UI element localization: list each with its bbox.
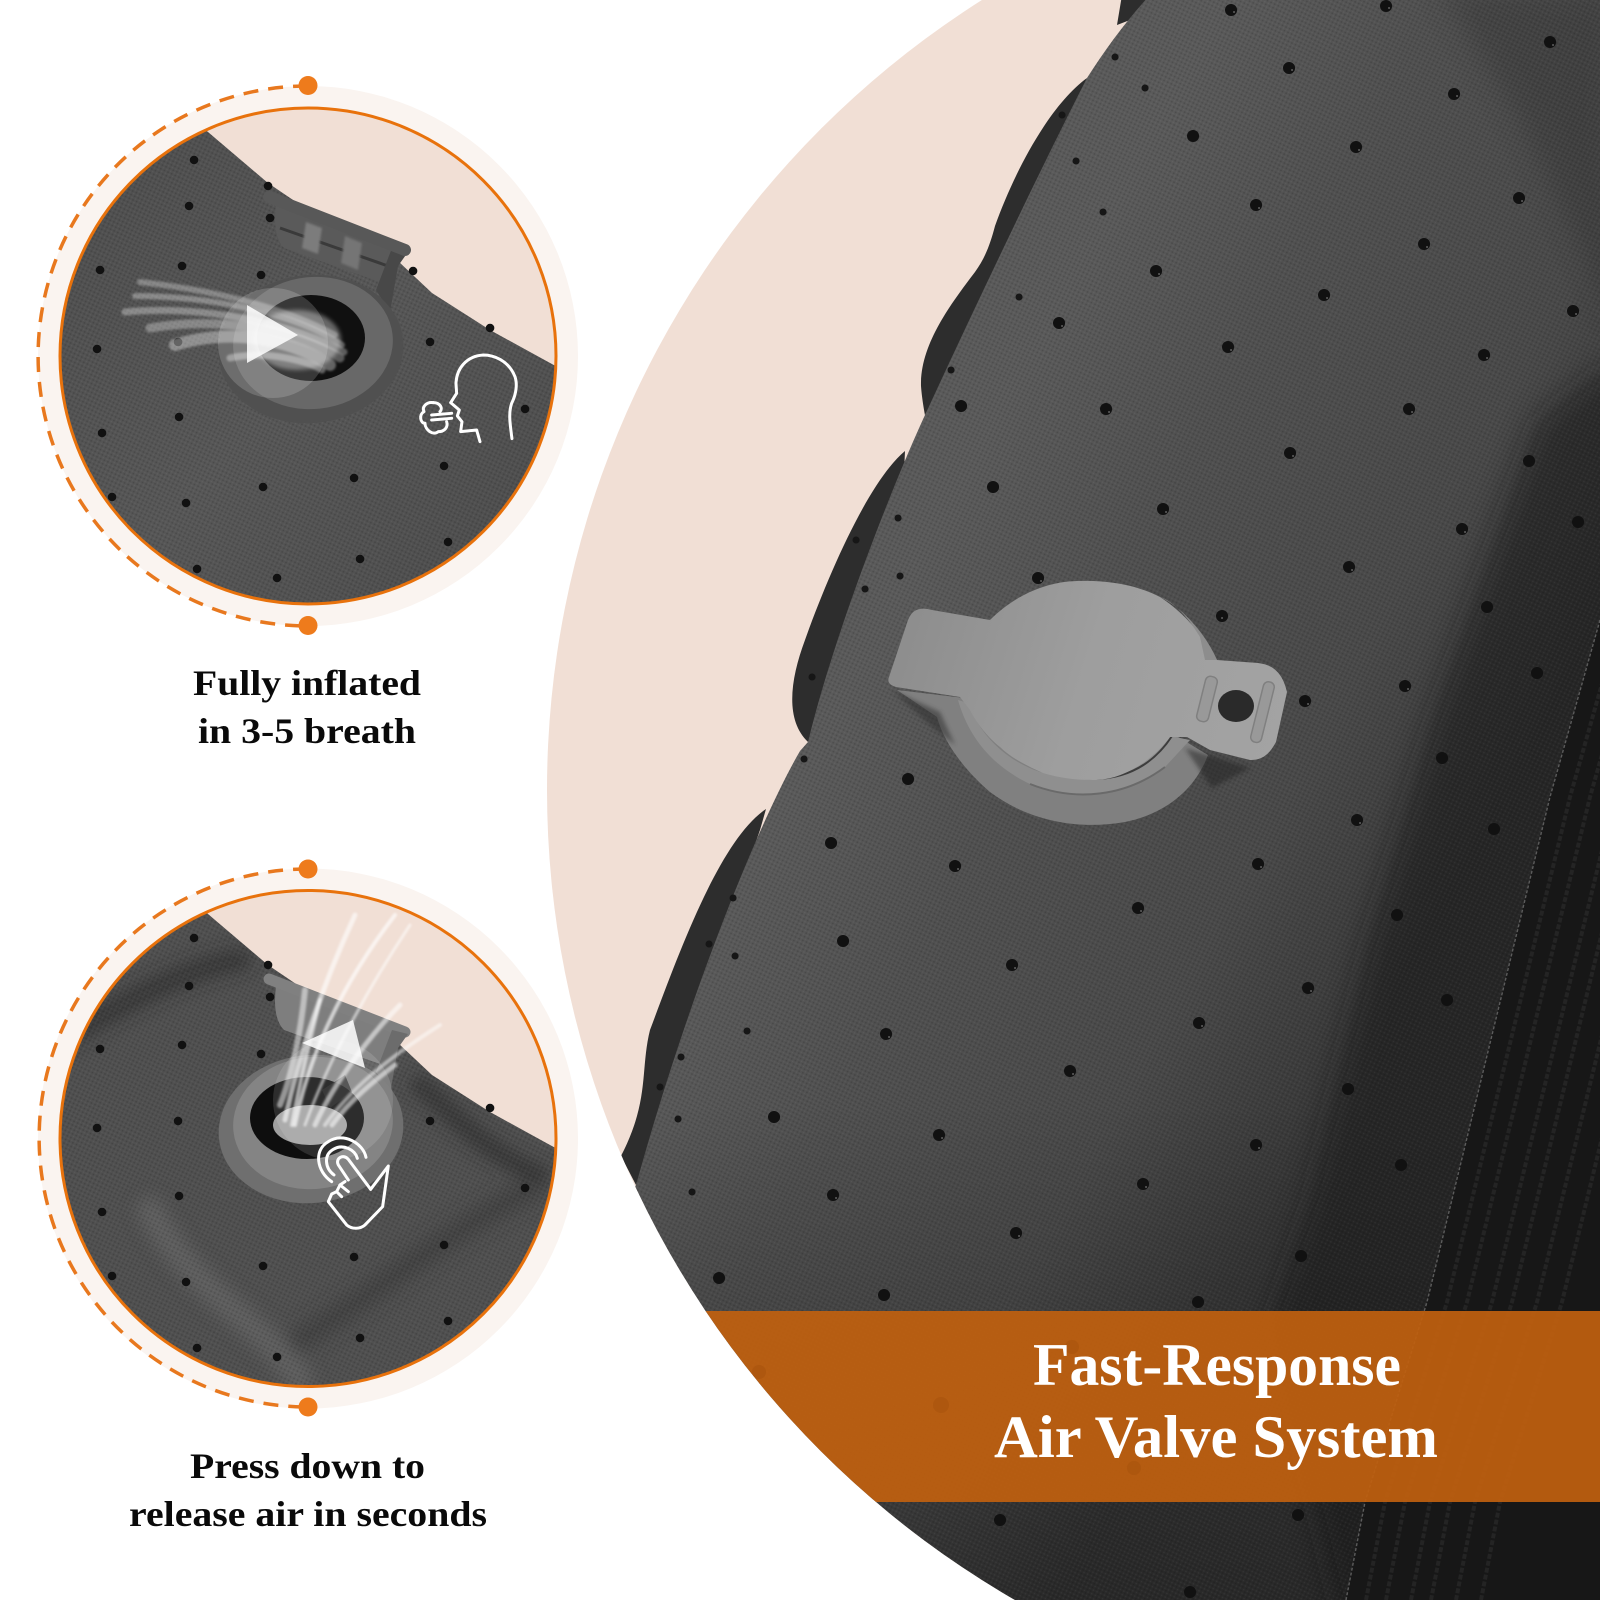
caption: inflate: in 3-5 breath: [198, 711, 416, 751]
cloth dots: [97, 160, 525, 578]
cloth dots: [97, 938, 525, 1357]
caption: inflate: [193, 663, 421, 751]
cloth: [62, 914, 554, 1385]
halo disc: [38, 868, 578, 1408]
title: Fast-Response Air Valve System: Air Valve System: [994, 1404, 1438, 1470]
strap with ribs and seam: [1346, 620, 1600, 1600]
side valve cap: [269, 979, 408, 1094]
caption: inflate: Fully inflated: [193, 663, 421, 703]
pillow perforation dots: [660, 6, 1578, 1592]
air streaks: [280, 915, 440, 1125]
title: Fast-Response Air Valve System: Fast-Response: [1033, 1332, 1401, 1398]
peach backdrop: [547, 0, 1128, 1598]
arrow: inflate direction: [247, 305, 298, 363]
orange ring: [60, 108, 556, 604]
dark cap shadow inside valve: [322, 1075, 352, 1108]
top marker dot: [298, 76, 318, 95]
pillow fabric surface: [600, 0, 1600, 1600]
bottom marker dot: [298, 1398, 318, 1416]
bottom marker dot: [298, 616, 318, 635]
arrow: deflate direction: [302, 1020, 365, 1068]
peach background: [208, 892, 554, 1148]
icon: face blowing air: [421, 355, 516, 442]
translucent disc: [273, 1040, 393, 1160]
lid slot left: [1196, 675, 1218, 723]
photo: fabric and valve: [62, 110, 554, 602]
valve inner ring: [958, 700, 1190, 794]
caption: deflate: [129, 1446, 487, 1534]
valve ring: [218, 1054, 404, 1204]
valve ring: [218, 275, 403, 423]
cloth wrinkles: [60, 960, 540, 1380]
valve base flange: [897, 690, 1208, 825]
top marker dot: [298, 860, 318, 878]
pillow back lobes: [621, 0, 1150, 1185]
lid slot right: [1250, 681, 1275, 744]
translucent disc: [218, 288, 328, 398]
dashed arc: [38, 86, 308, 626]
air streaks: [125, 282, 344, 370]
caption: deflate: Press down to: [190, 1446, 425, 1486]
panel: inflate detail circle: [38, 76, 578, 635]
orange ring: [60, 890, 556, 1386]
panel: large peach circle with pillow photo: [500, 0, 1600, 1600]
halo disc: [38, 86, 578, 626]
title band: [706, 1311, 1600, 1502]
side valve cap: [269, 197, 408, 312]
icon: finger pressing: [319, 1138, 388, 1228]
large valve cap: [888, 581, 1287, 825]
title: Fast-Response Air Valve System: [994, 1332, 1438, 1470]
lid hole: [1218, 690, 1254, 722]
photo: fabric and valve: [62, 892, 554, 1385]
peach background: [207, 110, 554, 365]
cloth: [62, 131, 554, 602]
dashed arc: [39, 869, 308, 1407]
valve lid with tabs: [888, 581, 1287, 780]
panel: deflate detail circle: [38, 860, 578, 1416]
caption: deflate: release air in seconds: [129, 1494, 487, 1534]
